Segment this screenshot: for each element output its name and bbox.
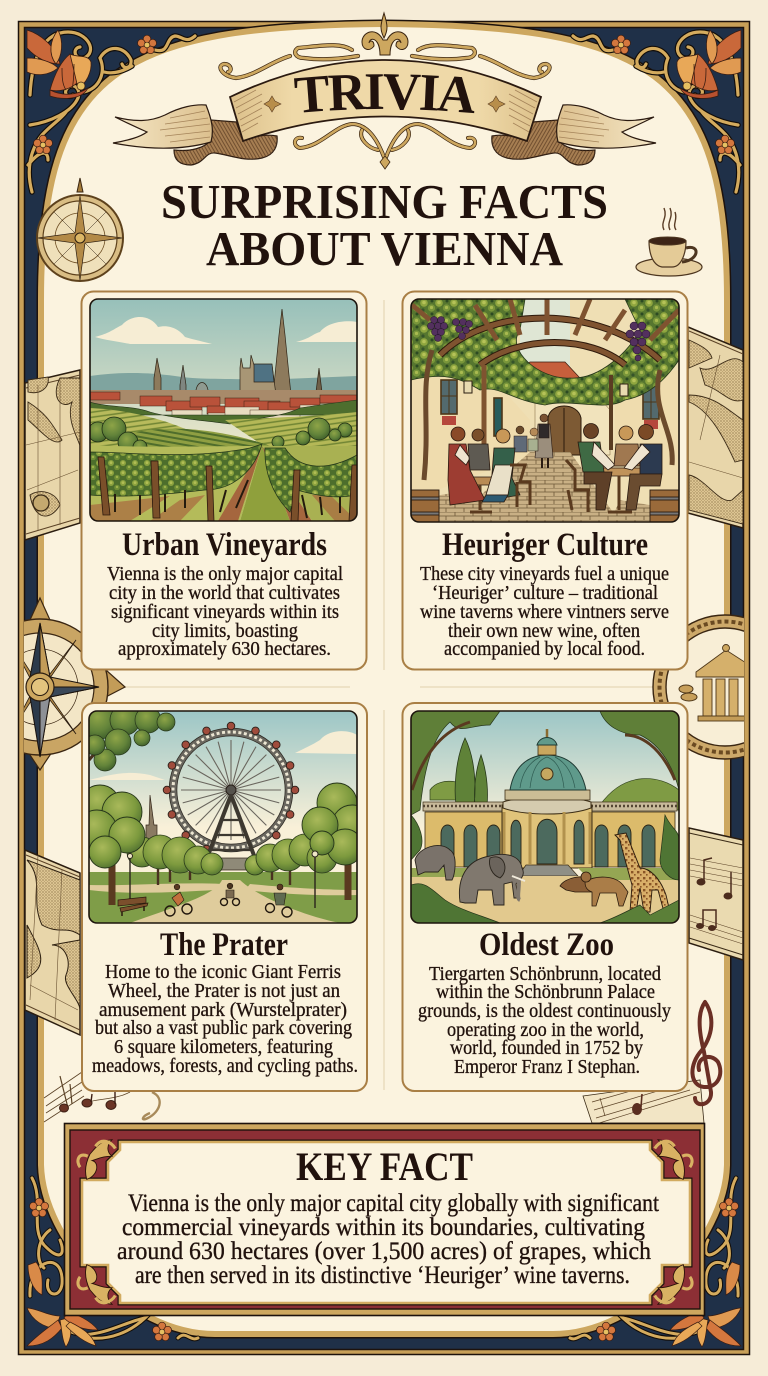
side walls — [411, 360, 530, 500]
card text: world, founded in 1752 by — [450, 1037, 643, 1059]
roofs — [90, 392, 357, 414]
grapes — [428, 316, 650, 361]
card text: Home to the iconic Giant Ferris — [105, 961, 341, 983]
map: upper right — [688, 327, 743, 528]
key fact text: Vienna is the only major capital city globally with significant — [128, 1188, 659, 1217]
ribbon right tail — [492, 105, 656, 165]
heading: TRIVIA: TRIVIA — [294, 74, 474, 114]
bear and lion — [560, 872, 628, 906]
elephants — [415, 845, 525, 905]
top branch — [90, 745, 106, 761]
illustration: wine tavern courtyard — [411, 299, 679, 522]
corner fleurons — [78, 1140, 692, 1304]
tree clumps — [90, 416, 352, 447]
card text: city in the world that cultivates — [109, 582, 340, 604]
pergola beams — [440, 318, 660, 365]
card text: wine taverns where vintners serve — [420, 601, 669, 623]
hedge — [90, 400, 357, 424]
heading: main title: ABOUT VIENNA — [206, 221, 564, 276]
illustration: schonbrunn zoo pavilion — [411, 711, 679, 923]
illustration: giant ferris wheel in park — [90, 712, 356, 922]
title ribbon — [112, 59, 656, 170]
panel: key fact — [64, 1124, 704, 1316]
heading: main title — [161, 174, 608, 276]
card text: Wheel, the Prater is not just an — [108, 980, 340, 1002]
back wall — [534, 404, 610, 456]
lanterns — [464, 381, 628, 396]
cyclists — [165, 898, 292, 917]
panel: heuriger culture — [402, 292, 688, 670]
foliage canopy — [411, 299, 679, 405]
card title: Heuriger Culture — [442, 527, 648, 563]
map: upper left — [25, 370, 80, 540]
cathedral — [154, 309, 322, 396]
key fact text — [117, 1188, 659, 1289]
card text: accompanied by local food. — [444, 638, 645, 660]
barrels — [411, 490, 679, 522]
card text: These city vineyards fuel a unique — [420, 563, 669, 585]
top crest ornament — [220, 13, 550, 78]
ornament: bottom-right corner — [570, 1178, 741, 1347]
building — [425, 812, 675, 867]
key fact heading: KEY FACT — [296, 1144, 473, 1189]
ornament: bottom-left corner — [27, 1178, 198, 1347]
lawn and path — [89, 872, 357, 923]
card text — [92, 961, 358, 1077]
music notes: bottom left — [44, 1072, 160, 1122]
floor — [474, 452, 614, 522]
posts and trunks — [482, 365, 486, 450]
key fact text: are then served in its distinctive ‘Heuriger’ wine taverns. — [135, 1260, 630, 1289]
cypress — [455, 738, 487, 805]
bench — [118, 897, 148, 916]
temple — [696, 644, 744, 722]
grounds — [411, 876, 679, 923]
steps — [518, 865, 578, 876]
big trees — [108, 864, 116, 905]
wheel — [163, 722, 299, 870]
key fact text: around 630 hectares (over 1,500 acres) of grapes, which — [117, 1236, 651, 1265]
left table group — [448, 427, 530, 512]
waiter — [535, 414, 553, 468]
card title: Oldest Zoo — [479, 927, 614, 963]
rotunda — [502, 805, 592, 868]
map: lower left — [25, 850, 80, 1035]
ribbon main band — [230, 60, 541, 141]
music sheet and treble clef: bottom right — [583, 1002, 720, 1124]
midground trees — [127, 834, 337, 885]
card text: city limits, boasting — [152, 620, 298, 642]
card title: Urban Vineyards — [122, 527, 327, 563]
panel: the prater — [77, 703, 372, 1091]
windows — [441, 380, 659, 436]
card text: Vienna is the only major capital — [107, 563, 343, 585]
ribbon stars — [264, 96, 505, 112]
sheet music: lower right — [689, 828, 743, 960]
giraffe — [615, 833, 670, 912]
card text: approximately 630 hectares. — [118, 638, 331, 660]
arched windows — [441, 819, 655, 867]
icon: coffee cup — [636, 208, 702, 276]
ornament: top-right corner — [573, 30, 741, 192]
card text: grounds, is the oldest continuously — [418, 1000, 671, 1022]
card text: Emperor Franz I Stephan. — [454, 1056, 640, 1078]
panel: oldest zoo — [402, 703, 688, 1091]
ornament: top-left corner — [27, 30, 195, 192]
faint dividers — [100, 300, 670, 1090]
right table group — [566, 424, 662, 512]
lamp posts — [130, 855, 315, 908]
card text: significant vineyards within its — [111, 601, 339, 623]
panel: urban vineyards — [82, 292, 366, 670]
posts — [98, 457, 357, 521]
card text — [418, 963, 671, 1078]
coins — [679, 685, 697, 701]
card text: but also a vast public park covering — [95, 1017, 352, 1039]
lower flourish — [295, 124, 475, 169]
dome — [510, 755, 586, 790]
card title: The Prater — [160, 927, 288, 963]
card text: Tiergarten Schönbrunn, located — [429, 963, 661, 985]
card text: amusement park (Wurstelprater) — [99, 999, 347, 1021]
back diners — [514, 426, 538, 452]
heading: main title: SURPRISING FACTS — [161, 174, 608, 229]
key fact text: commercial vineyards within its boundaries, cultivating — [122, 1212, 645, 1241]
icon: large compass rose — [24, 596, 126, 771]
illustration: vineyard and skyline — [88, 299, 357, 521]
card text — [420, 563, 669, 660]
icon: medallion with temple — [652, 614, 744, 760]
icon: small compass — [37, 178, 123, 281]
ribbon left tail — [113, 105, 277, 165]
vine rows — [90, 444, 262, 496]
card text: ‘Heuriger’ culture – traditional — [432, 582, 658, 604]
card text: within the Schönbrunn Palace — [436, 981, 655, 1003]
card text: meadows, forests, and cycling paths. — [92, 1055, 358, 1077]
card text: operating zoo in the world, — [447, 1019, 644, 1041]
card text: their own new wine, often — [448, 620, 640, 642]
card text: 6 square kilometers, featuring — [114, 1036, 333, 1058]
foliage — [411, 711, 679, 923]
card text — [107, 563, 343, 660]
distant spire — [146, 795, 157, 845]
